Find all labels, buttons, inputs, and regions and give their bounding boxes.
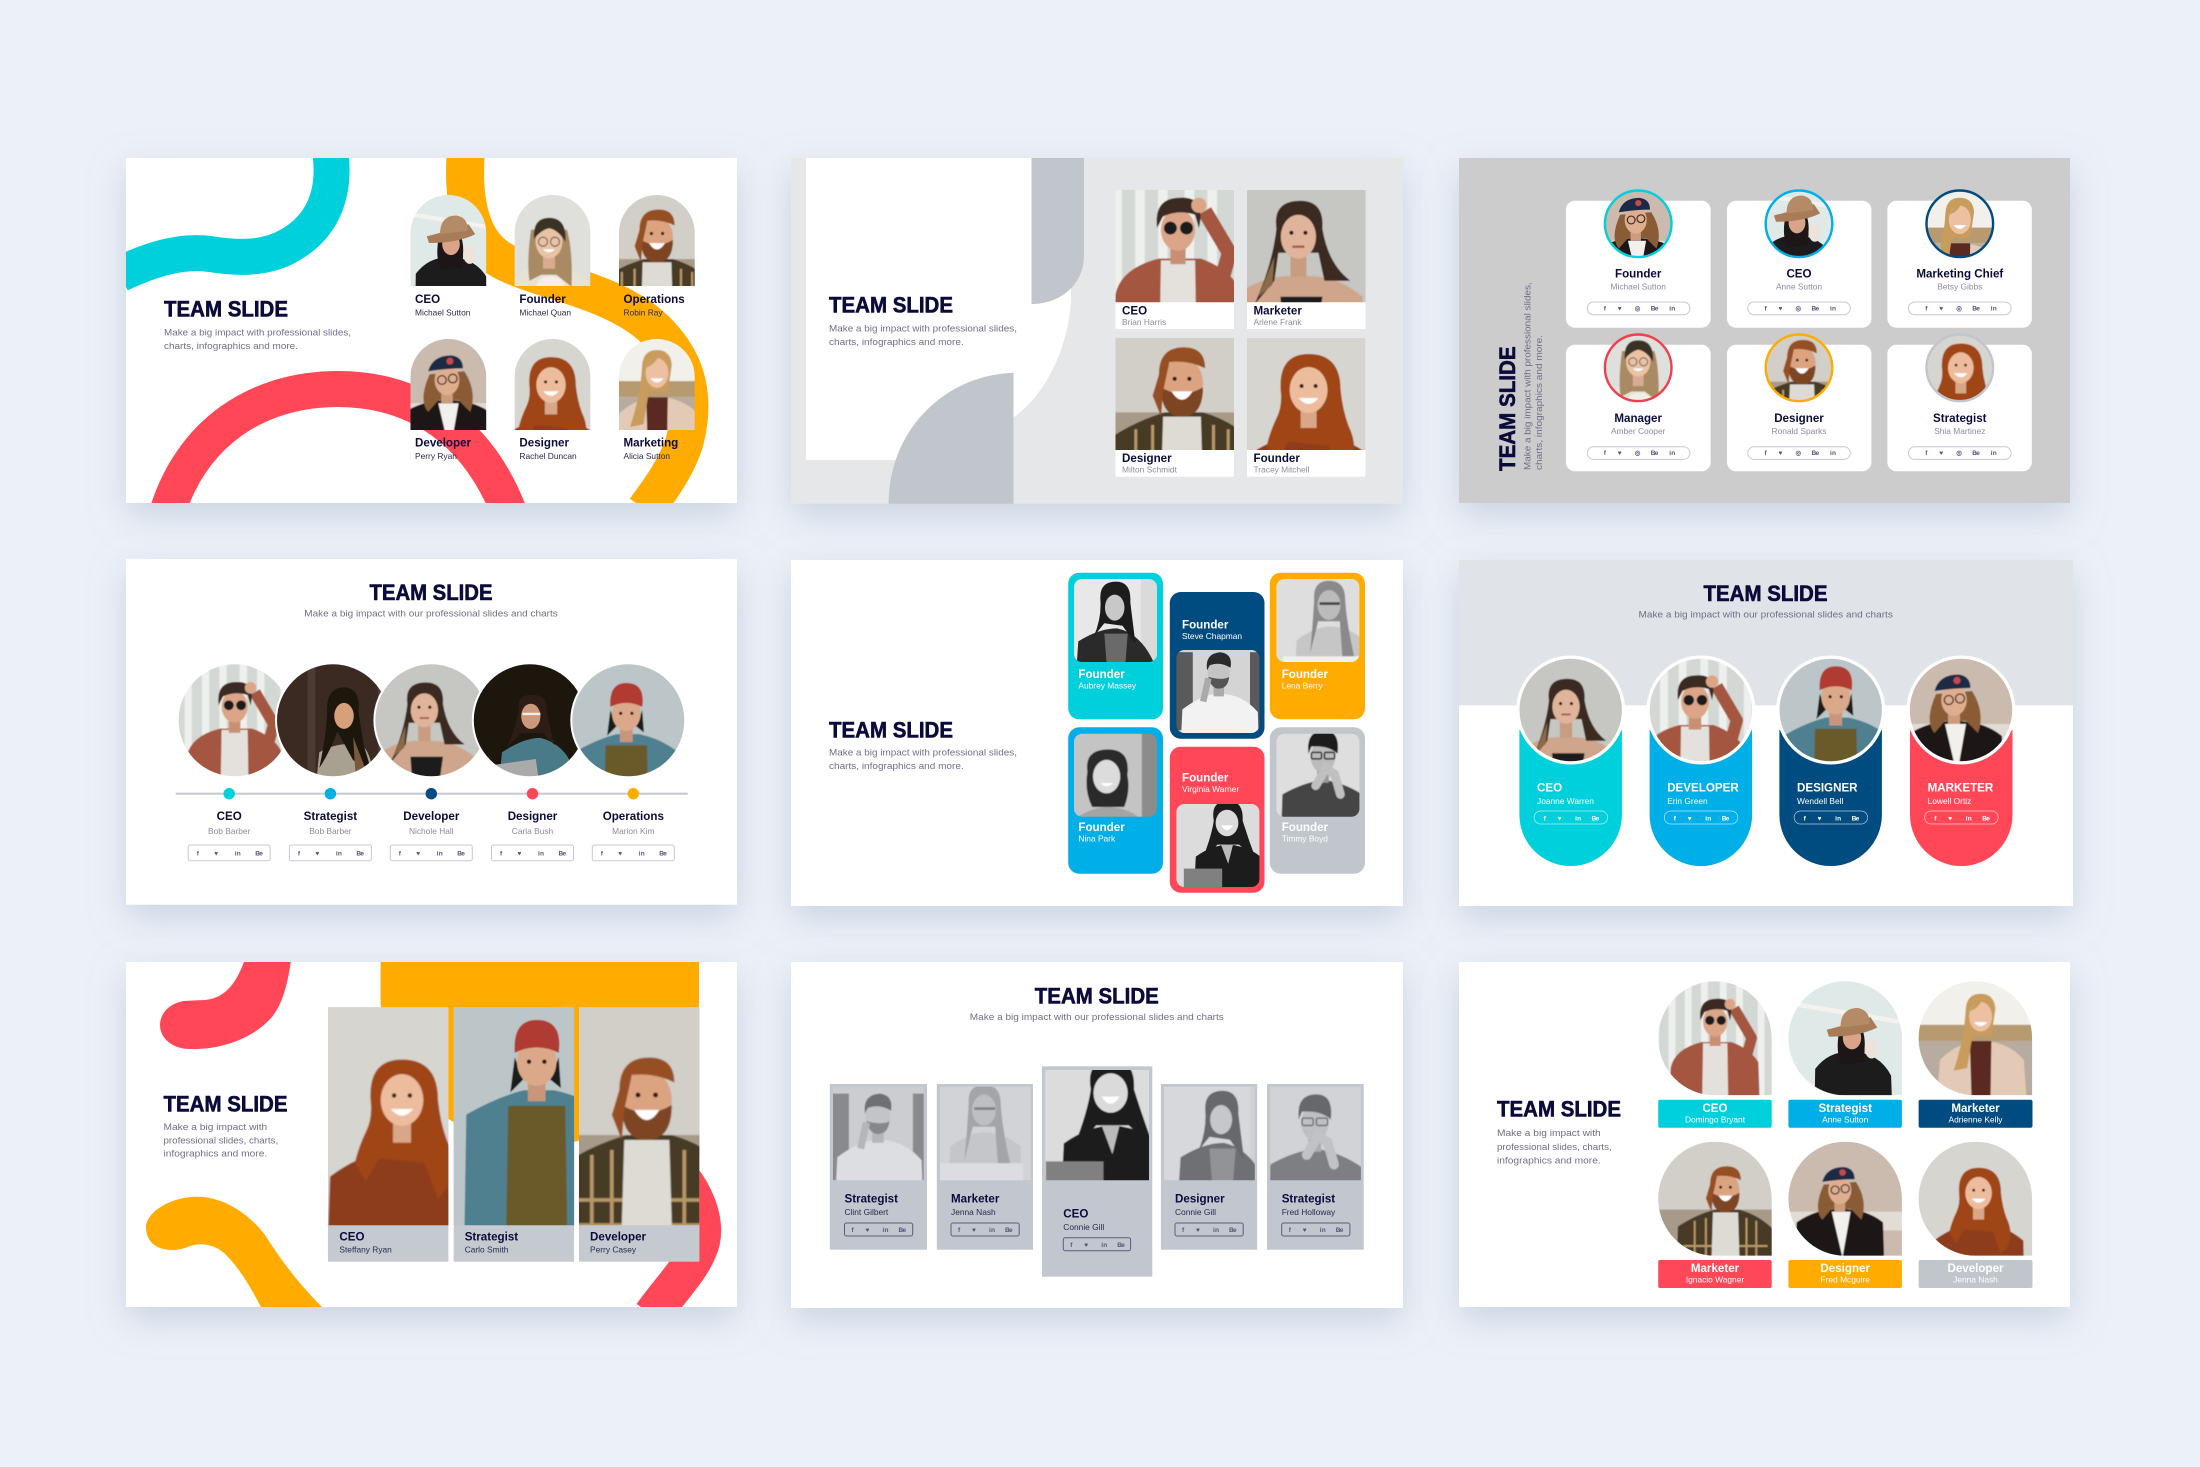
card: CEO Connie Gill: CEO — [1063, 1208, 1088, 1221]
member labels: Developer — [415, 437, 472, 450]
member: Operations — [592, 810, 674, 861]
card: Manager: Manager — [1614, 412, 1663, 425]
card: Strategist — [1758, 165, 2163, 570]
card: Designer: Designer — [1774, 412, 1824, 425]
photo: Operations — [619, 195, 695, 286]
member: Strategist: f♥inBe — [298, 850, 364, 858]
card: Marketing Chief: Marketing Chief — [1916, 267, 2003, 280]
member: Designer: Designer — [1820, 1262, 1870, 1275]
card: Strategist Clint Gilbert — [660, 899, 1096, 1334]
capsule: Developer — [1462, 469, 1928, 934]
card: CEO: f♥◎Bein — [1764, 306, 1836, 312]
member: Marketer Adrienne Kelly: Marketer — [1951, 1102, 2000, 1115]
card: Designer — [1116, 338, 1234, 477]
member labels: Michael Quan — [519, 308, 571, 318]
card: Marketing Chief: f♥◎Bein — [1925, 306, 1997, 312]
card: Designer: Ronald Sparks — [1772, 426, 1826, 436]
member labels: Designer — [519, 437, 570, 450]
card: Designer Connie Gill: f♥inBe — [1182, 1227, 1237, 1234]
card: Strategist — [207, 732, 867, 1392]
description: professional slides, charts, — [164, 1135, 278, 1146]
card: Strategist: Strategist — [1933, 412, 1987, 425]
red arc — [165, 389, 512, 520]
card: CEO Connie Gill: Connie Gill — [1063, 1222, 1104, 1232]
card: Founder: Founder — [1615, 267, 1662, 280]
card: CEO: Anne Sutton — [1776, 281, 1822, 291]
panel: slide 8 grey cards with centre highlight — [660, 823, 1555, 1363]
member: CEO — [1513, 819, 1918, 1224]
description — [164, 328, 351, 352]
slide background — [791, 560, 1403, 906]
panel: slide 6 capsule cards — [1334, 457, 2179, 939]
capsule: Developer: Erin Green — [1667, 796, 1708, 806]
yellow blob bottom — [146, 1197, 322, 1307]
capsule: Designer: DESIGNER — [1797, 781, 1858, 794]
card: Steve Chapman: Founder — [1182, 619, 1229, 632]
card: Strategist Clint Gilbert: Clint Gilbert — [844, 1207, 889, 1217]
card: Marketer — [1247, 190, 1366, 329]
member: Designer: Fred Mcguire — [1821, 1275, 1870, 1285]
slide background — [791, 158, 1403, 504]
slide background — [126, 559, 737, 905]
card: Founder: f♥◎Bein — [1604, 306, 1675, 312]
card: CEO — [64, 762, 740, 1438]
capsule: CEO — [1334, 474, 1798, 939]
description: Make a big impact with — [1497, 1128, 1601, 1139]
card: Marketer Jenna Nash — [774, 900, 1194, 1320]
title: TEAM SLIDE — [1704, 581, 1828, 606]
member: CEO — [188, 810, 270, 861]
card: Virginia Warner — [1047, 643, 1407, 1003]
vertical description: charts, infographics and more. — [1534, 335, 1545, 470]
card: Aubrey Massey — [920, 410, 1310, 800]
card: CEO: Brian Harris — [1122, 317, 1166, 327]
description — [829, 324, 1017, 348]
member: Strategist — [289, 810, 371, 861]
photo: Strategist — [148, 518, 538, 908]
card: Designer Connie Gill: Designer — [1175, 1192, 1225, 1205]
card: Founder: Tracey Mitchell — [1254, 464, 1310, 474]
member: Marketer Ignacio Wagner: Marketer — [1691, 1262, 1740, 1275]
member: Operations: Operations — [603, 810, 664, 823]
card: Developer — [272, 725, 1022, 1467]
description: charts, infographics and more. — [164, 341, 298, 352]
member: Designer: f♥inBe — [500, 850, 566, 858]
card: Strategist Fred Holloway — [1075, 883, 1555, 1363]
title: TEAM SLIDE — [829, 293, 953, 318]
card: Virginia Warner: Founder — [1182, 772, 1229, 785]
card: Developer: Developer — [590, 1230, 647, 1243]
slide background — [791, 962, 1403, 1308]
card: Founder — [1247, 338, 1366, 477]
card: Marketer: Marketer — [1254, 305, 1302, 318]
member labels: Founder — [519, 293, 566, 306]
capsule: CEO: f♥inBe — [1544, 816, 1600, 822]
card: CEO: CEO — [1786, 267, 1812, 280]
card: CEO: CEO — [1122, 305, 1147, 318]
card: Designer: Milton Schmidt — [1122, 464, 1178, 474]
white curved shape — [806, 158, 1071, 460]
card: Virginia Warner: Virginia Warner — [1182, 784, 1239, 794]
description: professional slides, charts, — [1497, 1142, 1612, 1153]
description: Make a big impact with professional slides, — [164, 328, 351, 339]
member: Developer: f♥inBe — [399, 850, 465, 858]
description: Make a big impact with — [164, 1122, 267, 1133]
card: Aubrey Massey: Aubrey Massey — [1078, 680, 1137, 690]
card: Strategist Fred Holloway: Fred Holloway — [1282, 1207, 1336, 1217]
card: Marketer: Arlene Frank — [1254, 317, 1302, 327]
member labels: Operations — [624, 293, 685, 306]
member: CEO: Bob Barber — [208, 826, 251, 836]
member: CEO: CEO — [217, 810, 242, 823]
title: TEAM SLIDE — [1035, 983, 1159, 1008]
photo: Marketing — [619, 339, 695, 430]
member labels: Perry Ryan — [415, 451, 457, 461]
capsule: Designer — [1596, 457, 2076, 937]
member: Operations: f♥inBe — [601, 850, 667, 858]
card: Strategist Fred Holloway: f♥inBe — [1289, 1227, 1344, 1234]
grey top shape — [1032, 158, 1084, 304]
description: infographics and more. — [164, 1149, 267, 1160]
member: Marketer Ignacio Wagner: Ignacio Wagner — [1686, 1275, 1744, 1285]
member: Marketer Adrienne Kelly: Adrienne Kelly — [1948, 1115, 2003, 1125]
description — [164, 1122, 278, 1160]
capsule: Developer: f♥inBe — [1674, 816, 1730, 822]
capsule: Designer: f♥inBe — [1804, 816, 1860, 822]
slide background — [1459, 560, 2073, 906]
cyan ribbon — [120, 150, 332, 274]
photo: Founder — [514, 195, 590, 286]
member: Strategist — [1680, 864, 2024, 1209]
member: Developer: Developer — [403, 810, 460, 823]
member: Operations: Marion Kim — [612, 826, 654, 836]
card: Lena Berry: Founder — [1282, 668, 1329, 681]
card: CEO — [1116, 190, 1234, 329]
card: Founder: Founder — [1254, 452, 1300, 465]
card: Strategist: Strategist — [465, 1230, 518, 1243]
card: Designer — [1600, 160, 2004, 571]
card: Strategist: f♥◎Bein — [1925, 450, 1997, 457]
timeline — [176, 788, 688, 799]
member labels: Robin Ray — [624, 308, 663, 318]
subtitle: Make a big impact with our professional slides and charts — [1639, 610, 1893, 621]
description: infographics and more. — [1497, 1155, 1601, 1166]
title: TEAM SLIDE — [164, 297, 288, 322]
card: Timmy Boyd — [1106, 539, 1540, 974]
card: Marketer Jenna Nash: f♥inBe — [958, 1227, 1013, 1234]
card: Aubrey Massey: Founder — [1078, 668, 1125, 681]
card: CEO — [1727, 189, 1872, 328]
member: Designer: Carla Bush — [512, 826, 554, 836]
capsule: Designer: Wendell Bell — [1797, 796, 1844, 806]
card: Nina Park: Nina Park — [1078, 833, 1116, 843]
card: Designer: Designer — [1122, 452, 1172, 465]
capsule: CEO: CEO — [1537, 781, 1562, 794]
member: Strategist: Strategist — [1818, 1102, 1872, 1115]
member: Developer — [390, 810, 472, 861]
card: CEO Connie Gill: f♥inBe — [1070, 1242, 1125, 1249]
grey bottom shape — [889, 373, 1014, 504]
card: Manager — [1436, 159, 1841, 564]
member: Marketer Adrienne Kelly — [1778, 814, 2183, 1230]
yellow top shape — [381, 962, 699, 1145]
member labels — [415, 293, 685, 461]
card: Lena Berry — [1126, 402, 1532, 808]
panel: slide 4 overlapping circles with timeline — [17, 473, 866, 953]
photo: Developer — [410, 339, 486, 430]
photo: Developer — [192, 478, 657, 943]
member: Developer: Jenna Nash — [1953, 1275, 1998, 1285]
card: Marketing Chief — [1765, 25, 2155, 425]
title: TEAM SLIDE — [370, 580, 492, 605]
panel: slide 5 coloured founder cards — [791, 402, 1540, 1015]
card: Steve Chapman: Steve Chapman — [1182, 631, 1242, 641]
panel: slide 3 grey background with six white cards — [1447, 158, 2082, 527]
card: Strategist Clint Gilbert: Strategist — [844, 1192, 898, 1205]
photo: Operations — [386, 473, 866, 953]
member: Marketer Ignacio Wagner — [1516, 980, 1936, 1406]
title: TEAM SLIDE — [164, 1091, 288, 1116]
photo: Designer — [514, 339, 590, 430]
slide background — [1459, 962, 2070, 1307]
yellow ribbon — [465, 150, 689, 510]
vertical title: TEAM SLIDE — [1495, 346, 1520, 471]
panel: slide 2 grey shapes with four cards — [779, 158, 1415, 528]
member labels: Rachel Duncan — [519, 451, 577, 461]
member: Strategist: Bob Barber — [309, 826, 352, 836]
card: Founder: Michael Sutton — [1610, 281, 1666, 291]
capsule: CEO: Joanne Warren — [1537, 796, 1594, 806]
card: Nina Park — [867, 535, 1347, 1015]
vertical description: Make a big impact with professional slides, — [1522, 282, 1534, 470]
description: charts, infographics and more. — [829, 761, 964, 772]
title: TEAM SLIDE — [1497, 1097, 1621, 1122]
slide background — [1459, 158, 2070, 503]
description: charts, infographics and more. — [829, 337, 964, 348]
card: Founder — [1566, 189, 1711, 328]
card: Steve Chapman — [1024, 478, 1414, 868]
member: CEO: CEO — [1702, 1102, 1728, 1115]
card: Designer Connie Gill: Connie Gill — [1175, 1207, 1216, 1217]
card: CEO: Steffany Ryan — [339, 1245, 392, 1255]
capsule: Marketer: f♥inBe — [1934, 816, 1990, 822]
card: CEO Connie Gill — [841, 823, 1381, 1363]
card: Manager: Amber Cooper — [1611, 426, 1666, 436]
member labels: Alicia Sutton — [624, 451, 670, 461]
capsule: Marketer: Lowell Ortiz — [1928, 796, 1971, 806]
card: Nina Park: Founder — [1078, 821, 1125, 834]
member: Designer — [492, 810, 574, 861]
title: TEAM SLIDE — [829, 717, 953, 742]
member labels: CEO — [415, 293, 440, 306]
member: Strategist: Anne Sutton — [1822, 1115, 1869, 1125]
member: Developer: Developer — [1947, 1262, 2004, 1275]
capsule: Developer: DEVELOPER — [1667, 781, 1739, 794]
member: CEO: Domingo Bryant — [1685, 1115, 1746, 1125]
description — [829, 747, 1017, 772]
photo: CEO — [410, 195, 486, 286]
member: Designer: Designer — [508, 810, 558, 823]
card: Lena Berry: Lena Berry — [1282, 680, 1323, 690]
member: Strategist: Strategist — [304, 810, 357, 823]
panel: slide 7 tall portraits with blobs — [64, 725, 1022, 1467]
slide background — [126, 962, 737, 1307]
capsule: Marketer — [1729, 475, 2179, 925]
red ribbon right — [652, 1165, 702, 1315]
card: Marketer Jenna Nash: Marketer — [951, 1192, 1000, 1205]
card: Strategist: Shia Martinez — [1934, 426, 1985, 436]
card: Strategist: Carlo Smith — [465, 1245, 509, 1255]
card: Strategist Clint Gilbert: f♥inBe — [852, 1227, 906, 1234]
card: Timmy Boyd: Timmy Boyd — [1282, 833, 1328, 843]
description: Make a big impact with professional slides, — [829, 324, 1017, 335]
card: Designer Connie Gill — [1004, 899, 1439, 1334]
description — [1497, 1128, 1612, 1166]
card: Manager: f♥◎Bein — [1604, 450, 1675, 457]
subtitle: Make a big impact with our professional slides and charts — [970, 1012, 1224, 1023]
member: Developer: Nichole Hall — [409, 826, 454, 836]
panel: slide 9 egg portraits with colour labels — [1459, 814, 2189, 1406]
photo: CEO — [17, 489, 452, 924]
description: Make a big impact with professional slides, — [829, 747, 1017, 758]
member labels: Michael Sutton — [415, 308, 471, 318]
member: Designer — [1637, 987, 2042, 1392]
slide background — [126, 158, 737, 503]
grey header band — [1459, 560, 2073, 705]
member: CEO: f♥inBe — [197, 850, 263, 858]
vertical description — [1522, 282, 1545, 470]
card: Marketing Chief: Betsy Gibbs — [1937, 281, 1982, 291]
card: Timmy Boyd: Founder — [1282, 821, 1329, 834]
photo: Designer — [351, 536, 711, 896]
capsule: Marketer: MARKETER — [1928, 781, 1994, 794]
card: CEO: CEO — [339, 1230, 365, 1243]
panel: slide 1 arched portraits with ribbons — [114, 158, 749, 527]
member labels: Marketing — [624, 437, 678, 450]
card: Designer: f♥◎Bein — [1764, 450, 1836, 457]
member: Developer — [1769, 983, 2189, 1403]
card: Marketer Jenna Nash: Jenna Nash — [951, 1207, 996, 1217]
card: Strategist Fred Holloway: Strategist — [1282, 1192, 1335, 1205]
red blob top — [160, 962, 291, 1049]
card: Developer: Perry Casey — [590, 1245, 637, 1255]
subtitle: Make a big impact with our professional slides and charts — [304, 609, 558, 620]
